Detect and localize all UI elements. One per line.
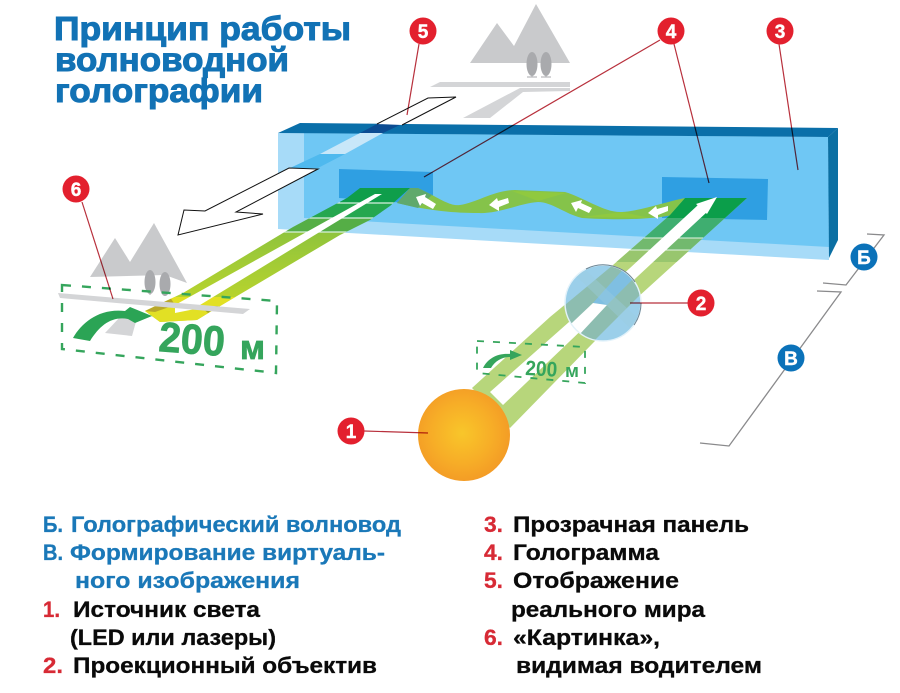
title	[54, 10, 351, 109]
small virtual image: 200 m: 200	[525, 357, 558, 382]
legend: right column: 6.	[484, 625, 503, 650]
right input beam	[472, 197, 747, 428]
legend: right column: видимая водителем	[516, 653, 762, 678]
legend: left column: Б.	[43, 512, 63, 537]
small virtual image: 200 m: м	[565, 361, 579, 381]
title: волноводной	[55, 41, 289, 78]
brackets: waveguide and virtual image ranges	[700, 234, 884, 446]
legend: left column: 1.	[43, 597, 60, 622]
real-world light passing through the panel	[290, 124, 402, 168]
marker 1: 1	[346, 422, 357, 443]
marker В	[778, 344, 804, 372]
legend: right column: реального мира	[511, 597, 706, 622]
legend: left column: ного изображения	[75, 568, 300, 593]
icon: projection lens	[564, 264, 642, 342]
panel: transparent waveguide	[278, 123, 838, 260]
driver image frame: 200 m: м	[240, 329, 265, 367]
leader lines	[82, 40, 798, 433]
marker 3	[766, 18, 794, 44]
outlined real-world arrow, lower part	[178, 168, 318, 235]
outlined real-world arrow, upper part	[377, 97, 456, 125]
real-world scene: mountains and road	[430, 4, 570, 118]
legend: right column: «Картинка»,	[513, 625, 660, 650]
legend: left column: Проекционный объектив	[73, 653, 377, 678]
marker В: В	[784, 349, 798, 370]
marker Б: Б	[857, 248, 871, 269]
marker 1	[338, 418, 364, 444]
legend: right column: 3.	[484, 512, 503, 537]
legend: right column	[484, 512, 762, 678]
left output beam	[145, 188, 410, 322]
title: голографии	[55, 72, 263, 109]
marker 4: 4	[666, 22, 677, 43]
marker 2	[688, 290, 714, 316]
hologram: left	[339, 169, 433, 205]
marker Б	[850, 244, 878, 270]
legend: left column: Формирование виртуаль-	[70, 540, 385, 565]
marker 3: 3	[775, 22, 785, 43]
marker 2: 2	[696, 294, 706, 315]
legend: left column: Источник света	[73, 597, 261, 622]
marker 5: 5	[418, 22, 429, 43]
driver image frame: 200 m: 200	[157, 313, 227, 365]
marker 6: 6	[71, 180, 81, 201]
hologram: right	[662, 177, 768, 220]
legend: right column: Прозрачная панель	[513, 512, 749, 537]
title: Принцип работы	[54, 10, 351, 47]
icon: light source sun	[418, 389, 510, 481]
marker 5	[410, 18, 436, 44]
legend: left column: Голографический волновод	[71, 512, 401, 537]
legend: right column: Голограмма	[513, 540, 660, 565]
legend: left column: 2.	[43, 653, 63, 678]
wave direction arrows	[416, 194, 668, 219]
legend: right column: 4.	[484, 540, 503, 565]
marker 6	[62, 176, 90, 202]
legend: left column: (LED или лазеры)	[70, 625, 276, 650]
wave band inside the waveguide	[397, 188, 685, 219]
legend: right column: 5.	[484, 568, 503, 593]
driver image frame: 200 m	[62, 285, 277, 373]
legend: right column: Отображение	[513, 568, 679, 593]
small virtual image: 200 m	[477, 341, 585, 383]
legend: left column: В.	[43, 540, 63, 565]
marker 4	[658, 18, 684, 44]
driver image scene: mountains and road	[58, 223, 250, 336]
legend: left column	[43, 512, 401, 678]
